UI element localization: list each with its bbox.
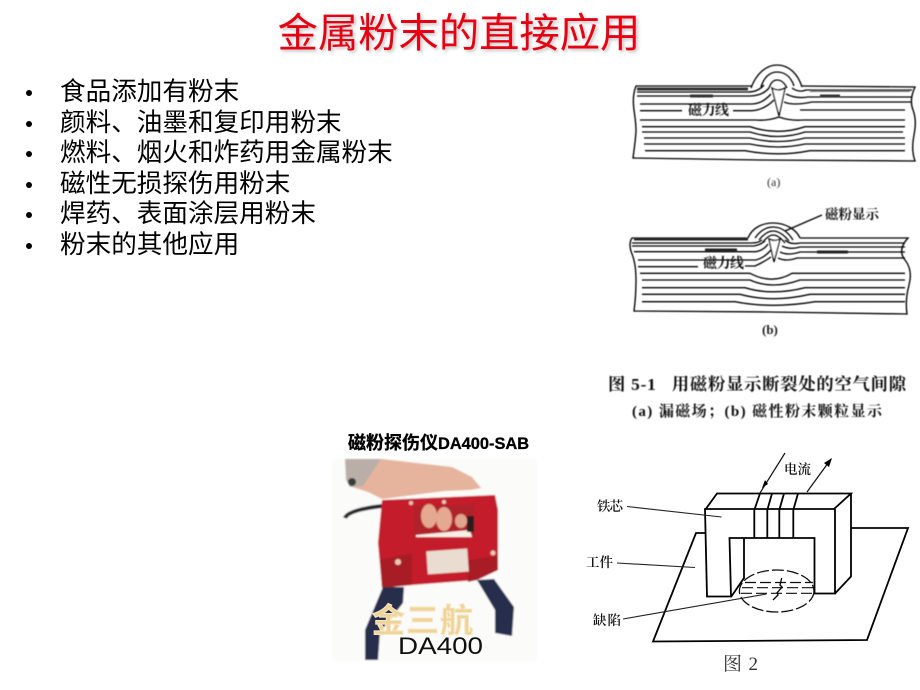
label: current: 电流 [784, 461, 812, 477]
label: powder indication: 磁粉显示 [825, 206, 880, 222]
bullet: other uses: 粉末的其他应用 [60, 231, 239, 259]
label: magnetic lines b: 磁力线 [703, 255, 744, 272]
specimen outline b [630, 238, 910, 314]
leader to powder label [785, 215, 822, 231]
label: workpiece: 工件 [586, 555, 614, 570]
title: 金属粉末的直接应用 [278, 11, 640, 56]
cable [345, 506, 382, 518]
handle window with fingers [414, 505, 474, 537]
workpiece plate [653, 528, 908, 642]
label: iron core: 铁芯 [597, 498, 624, 514]
product name: 磁粉探伤仪DA400-SAB [348, 433, 529, 453]
flux lines a [637, 85, 912, 154]
red device body [378, 495, 498, 587]
photo artwork [332, 459, 537, 661]
yoke iron core [705, 493, 851, 597]
info label [426, 549, 469, 574]
figure sub-caption: (a) 漏磁场；(b) 磁性粉末颗粒显示 [632, 402, 883, 420]
watermark: 金三航 [372, 602, 473, 639]
diagram: yoke magnetic particle inspection figure 2 [586, 453, 908, 675]
crack a [772, 88, 785, 116]
caption (b): (b) [762, 322, 778, 337]
magnetized bars b [634, 239, 848, 252]
arched field lines b [748, 223, 800, 243]
figure 2 caption: 图 2 [723, 653, 758, 675]
caption (a): (a) [767, 175, 780, 189]
bullet: pigment and ink powder: 颜料、油墨和复印用粉末 [60, 109, 342, 137]
model label: DA400 [398, 633, 483, 660]
bullet list of powder applications [26, 78, 393, 259]
diagram (a): leakage magnetic field [633, 65, 915, 189]
specimen outline a [633, 86, 915, 161]
coil windings [754, 494, 798, 538]
magnetized bars a [637, 89, 840, 96]
figure caption 5-1: 图 5-1 用磁粉显示断裂处的空气间隙 [608, 374, 908, 394]
left leg [365, 587, 404, 660]
leader lines [617, 506, 766, 619]
watch [345, 459, 381, 487]
current wires and arrows [760, 453, 831, 493]
bullet: food additive powder: 食品添加有粉末 [60, 78, 239, 106]
product photo: DA400 magnetic flaw detector [332, 433, 537, 661]
rivets [395, 559, 401, 565]
flux lines b [632, 240, 905, 305]
bullet: fuel and explosive powder: 燃料、烟火和炸药用金属粉末 [60, 139, 393, 167]
bullet: magnetic testing powder: 磁性无损探伤用粉末 [60, 170, 290, 198]
arched field lines a [751, 65, 802, 88]
defect region [739, 570, 814, 612]
bullet: welding flux and coating powder: 焊药、表面涂层用粉末 [60, 200, 316, 228]
right leg [477, 579, 514, 636]
crack b [769, 239, 780, 262]
hand [345, 459, 481, 499]
diagram (b): magnetic powder indication [608, 206, 910, 420]
label: defect: 缺陷 [593, 612, 621, 628]
label: magnetic lines a: 磁力线 [688, 102, 729, 119]
